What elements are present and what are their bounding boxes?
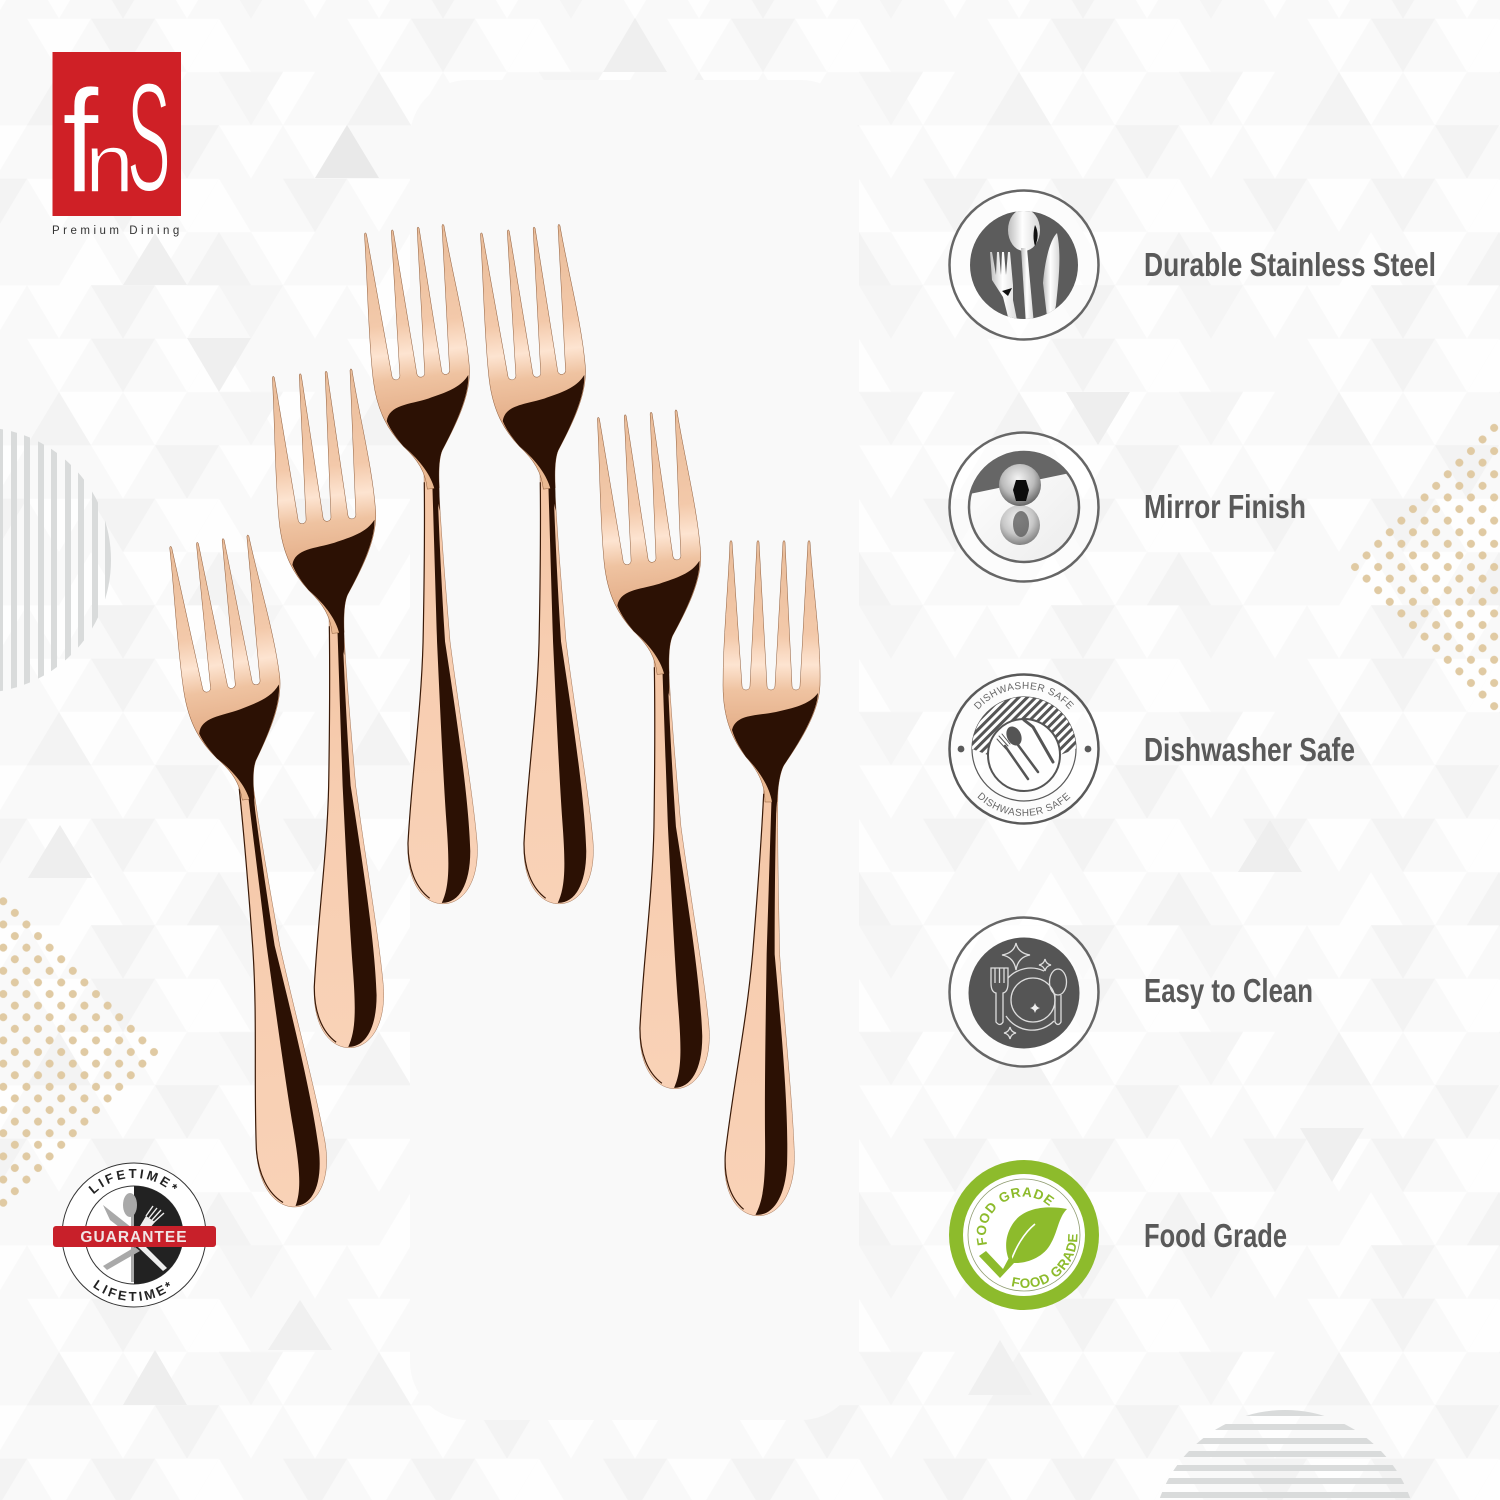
logo: FnS Premium Dining: [52, 51, 183, 237]
lifetime guarantee badge: [53, 1162, 216, 1308]
icon: easy to clean: [950, 918, 1098, 1066]
lifetime guarantee badge: LIFETIME*: [93, 1280, 170, 1301]
icon: mirror finish: [950, 432, 1098, 582]
icon: stainless steel cutlery: [950, 190, 1098, 340]
label: Durable Stainless Steel: Durable Stainless Steel: [1144, 246, 1436, 283]
logo: FnS Premium Dining: Premium Dining: [52, 225, 183, 237]
label: Food Grade: Food Grade: [1144, 1217, 1287, 1254]
decoration: right dots: [1349, 413, 1500, 721]
label: Dishwasher Safe: Dishwasher Safe: [1144, 731, 1355, 768]
fork 6: [723, 540, 820, 1217]
fork 5: [590, 409, 714, 1090]
logo: FnS Premium Dining: S: [127, 51, 171, 225]
fork 2: [265, 368, 389, 1049]
icon: food grade: FOOD GRADE: [976, 1187, 1054, 1246]
label: Mirror Finish: Mirror Finish: [1144, 488, 1306, 525]
logo: FnS Premium Dining: f: [62, 59, 100, 224]
fork 1: [163, 533, 333, 1211]
guarantee ribbon: [53, 1226, 216, 1247]
decoration: left dots: [0, 892, 160, 1212]
label: Easy to Clean: Easy to Clean: [1144, 972, 1313, 1009]
decoration: bottom stripes: [1150, 1410, 1420, 1498]
icon: dishwasher safe: [948, 673, 1100, 825]
center light panel: [410, 80, 859, 1420]
icon: dishwasher safe: DISHWASHER SAFE: [978, 792, 1070, 816]
decoration: left stripes: [0, 429, 111, 691]
guarantee ribbon: GUARANTEE: [80, 1229, 188, 1246]
icon: food grade: FOOD GRADE: [1012, 1234, 1078, 1288]
fork 3: [357, 223, 485, 905]
icon: food grade: [949, 1160, 1099, 1310]
lifetime guarantee badge: LIFETIME*: [88, 1169, 178, 1194]
icon: dishwasher safe: DISHWASHER SAFE: [974, 682, 1074, 710]
logo: FnS Premium Dining: n: [85, 117, 134, 211]
fork 4: [473, 223, 601, 905]
